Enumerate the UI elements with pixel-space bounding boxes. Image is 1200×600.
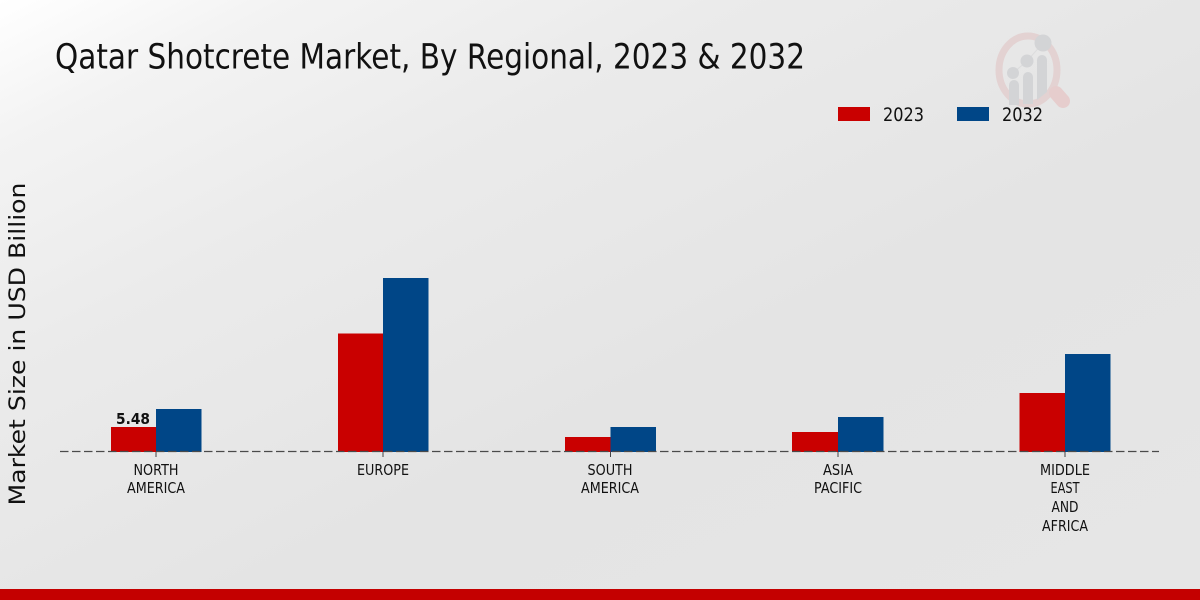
title: Qatar Shotcrete Market, By Regional, 2023 & 2032	[55, 38, 805, 78]
icon: watermark logo	[999, 34, 1063, 105]
label: Africa: AFRICA	[1042, 517, 1089, 535]
legend	[838, 104, 1043, 126]
bar chart	[60, 278, 1159, 457]
label: Pacific: PACIFIC	[814, 479, 862, 497]
legend: 2032	[957, 104, 1043, 126]
footer bar	[0, 589, 1200, 600]
legend: 2023: 2023	[883, 104, 924, 126]
bars: South America	[565, 427, 656, 452]
data label: 5.48: 5.48	[116, 410, 150, 428]
bars: Europe	[338, 278, 428, 452]
label: And: AND	[1052, 498, 1078, 516]
label: America: AMERICA	[127, 479, 186, 497]
label: East: EAST	[1050, 479, 1080, 497]
label: Asia: ASIA	[823, 461, 854, 479]
y axis label: Market Size in USD Billion	[5, 182, 31, 506]
label: America: AMERICA	[581, 479, 640, 497]
label: Middle: MIDDLE	[1040, 461, 1090, 479]
x axis labels	[127, 461, 1090, 535]
label: North: NORTH	[134, 461, 178, 479]
bars: Middle East and Africa	[1020, 354, 1110, 452]
label: South: SOUTH	[588, 461, 632, 479]
label: Europe: EUROPE	[357, 461, 409, 479]
bars: Asia Pacific	[792, 417, 884, 452]
legend: 2023	[838, 104, 924, 126]
legend: 2032: 2032	[1002, 104, 1043, 126]
bars: North America	[111, 409, 202, 452]
